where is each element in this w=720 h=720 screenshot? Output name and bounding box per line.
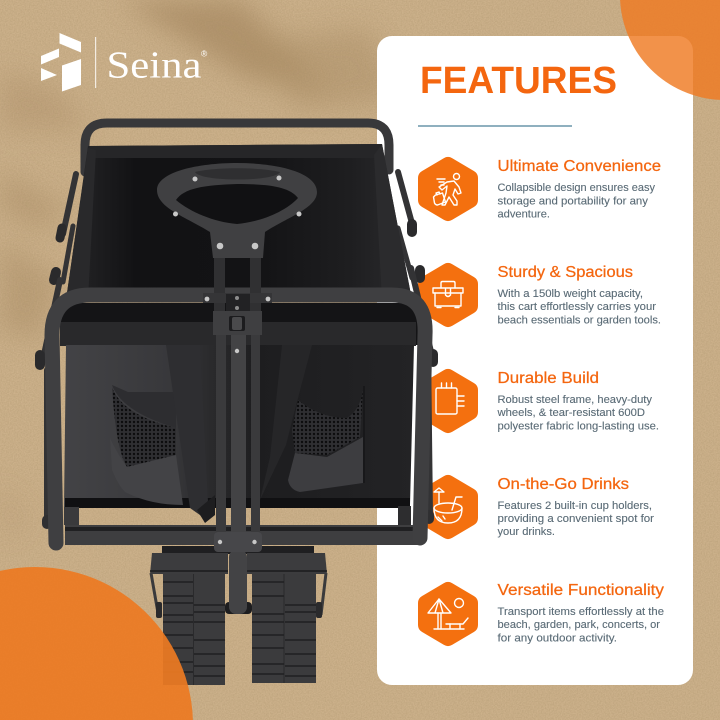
icon: person with luggage <box>426 165 470 213</box>
back side latches <box>40 172 433 524</box>
icon: durable material layers <box>426 377 470 425</box>
wagon wheels <box>151 573 326 685</box>
feature text: Ultimate Convenience: storage and portability for any <box>498 196 648 208</box>
feature text: Sturdy & Spacious: Sturdy & Spacious <box>498 264 633 281</box>
feature text: Durable Build: wheels, & tear-resistant 600D <box>497 407 645 419</box>
feature text: Versatile Functionality <box>498 582 664 644</box>
feature text: On-the-Go Drinks: On-the-Go Drinks <box>498 476 629 493</box>
feature text: Ultimate Convenience: Collapsible design ensures easy <box>498 182 655 194</box>
wheel axle brackets <box>150 546 327 614</box>
feature text: Versatile Functionality: Transport items effortlessly at the <box>498 606 664 618</box>
feature text: Durable Build: polyester fabric long-lasting use. <box>498 420 659 432</box>
right pocket <box>288 386 364 492</box>
heading divider <box>418 125 572 127</box>
decorative orange circle bottom left <box>0 567 193 720</box>
logo: Seina: ® <box>201 48 208 58</box>
feature text: Sturdy & Spacious <box>498 264 661 326</box>
heading: FEATURES: FEATURES <box>420 60 617 102</box>
feature text: Sturdy & Spacious: this cart effortlessly carries your <box>498 301 656 313</box>
rail hinge bracket <box>203 293 272 353</box>
panel: features card <box>377 36 693 685</box>
feature text: Versatile Functionality: beach, garden, park, concerts, or <box>498 619 660 631</box>
bottom frame bar <box>64 506 420 545</box>
left pocket <box>110 385 183 505</box>
feature text: Durable Build: Robust steel frame, heavy-duty <box>498 394 652 406</box>
back top rail <box>85 123 389 172</box>
decorative orange circle top right <box>620 0 720 100</box>
icon: beach umbrella and lounger <box>426 590 470 638</box>
feature text: On-the-Go Drinks: your drinks. <box>498 526 555 538</box>
feature text: Sturdy & Spacious: beach essentials or garden tools. <box>498 314 661 326</box>
feature text: Versatile Functionality: Versatile Functionality <box>498 582 664 599</box>
feature text: Durable Build: Durable Build <box>498 370 599 387</box>
feature text: Versatile Functionality: for any outdoor activity. <box>498 632 617 644</box>
feature text: Ultimate Convenience: Ultimate Convenience <box>498 158 661 175</box>
product: folding wagon <box>40 123 433 685</box>
feature text: Durable Build <box>497 370 659 432</box>
feature text: On-the-Go Drinks: providing a convenient spot for <box>498 513 654 525</box>
front rail and posts <box>52 295 425 543</box>
front basket fabric <box>60 303 420 508</box>
back fabric <box>66 144 412 300</box>
feature text: Sturdy & Spacious: With a 150lb weight capacity, <box>498 288 643 300</box>
logo: Seina <box>41 33 208 92</box>
feature text: Ultimate Convenience: adventure. <box>498 208 550 220</box>
pole clamp <box>214 532 262 552</box>
telescoping handle poles <box>214 256 261 535</box>
handle grip <box>157 163 317 258</box>
feature text: Ultimate Convenience <box>498 158 661 220</box>
feature text: On-the-Go Drinks: Features 2 built-in cup holders, <box>498 500 652 512</box>
logo: Seina: Seina <box>106 44 202 86</box>
icon: toolbox <box>426 271 470 319</box>
feature text: On-the-Go Drinks <box>498 476 654 538</box>
icon: coconut drink <box>426 483 470 531</box>
carry straps <box>166 345 312 523</box>
